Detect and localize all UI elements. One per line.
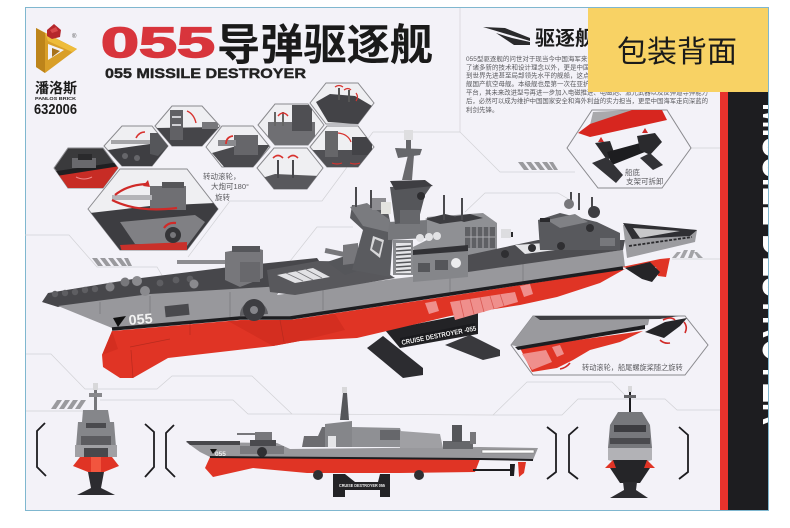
hex detail: propeller: 转动滚轮，船尾螺旋桨随之旋转 — [582, 363, 683, 372]
logo: Panlos Brick: PANLOS BRICK — [35, 96, 77, 101]
caption: rotating cannon: 大炮可180° — [211, 181, 249, 191]
main ship: hull number: 055 — [128, 310, 153, 328]
title: 055 MISSILE DESTROYER — [105, 65, 306, 81]
main ship: superstructure — [350, 130, 433, 277]
title: 055 — [101, 19, 215, 67]
main ship: wheel — [240, 299, 268, 321]
hex detail: rotating cannon — [88, 169, 220, 252]
stern view model — [605, 386, 655, 498]
decorative circuit lines — [25, 8, 720, 415]
title — [101, 11, 433, 81]
title: 导弹驱逐舰 — [217, 11, 433, 73]
main ship: bow studs — [52, 276, 198, 297]
hazard stripes — [51, 162, 558, 409]
hex detail: funnel and gun — [155, 106, 220, 148]
logo: Panlos Brick: ® — [72, 33, 77, 40]
main ship: display stand — [367, 312, 500, 378]
main ship model — [42, 130, 697, 378]
main ship: rear superstructure — [501, 192, 620, 258]
hex detail: stand: 支架可拆卸 — [626, 176, 664, 186]
main ship: mid block — [413, 195, 497, 282]
main ship: rear deck — [468, 240, 625, 272]
label: package back: 包装背面 — [617, 27, 737, 71]
caption: rotating cannon: 转动滚轮， — [203, 171, 240, 181]
hex detail: propeller — [511, 315, 708, 375]
main ship: hull sides — [58, 250, 625, 328]
section heading and paragraph: 平台，其未来改进型号再进一步加入电磁推进、电磁炮、激光武器以及反弹道导弹能力 — [466, 88, 708, 96]
side view model — [186, 387, 538, 497]
section heading and paragraph: 舰国产航空母舰。本级舰也是第一次在亚护航任 — [466, 79, 603, 88]
section icon: wings — [483, 27, 530, 45]
hex detail: masts — [257, 148, 323, 190]
section heading and paragraph: 驱逐舰 — [535, 22, 595, 51]
hex detail: bridge — [258, 104, 324, 147]
section heading and paragraph: 到世界先进甚至局部领先水平的舰船，这点让我 — [466, 70, 603, 80]
main ship: bow deck — [42, 258, 330, 307]
main ship: display stand: CRUISE DESTROYER -055 — [401, 326, 477, 347]
main ship: hull number — [113, 310, 153, 328]
section heading and paragraph: 了诸多新的技术和设计理念以外，更是中国海军 — [466, 62, 603, 72]
hex detail: stand — [567, 110, 691, 188]
main ship: forward turret — [325, 243, 360, 275]
main ship: waterline — [112, 268, 623, 329]
logo: Panlos Brick: 632006 — [34, 102, 77, 118]
hex detail: forward turret — [206, 126, 270, 168]
main ship: main gun — [177, 246, 263, 287]
hex detail: main gun — [104, 126, 170, 168]
main ship: pink vent blocks — [425, 284, 533, 320]
caption: rotating cannon: 旋转 — [215, 192, 230, 202]
hex detail: stand: 船底 — [625, 167, 640, 177]
label: package back — [588, 8, 768, 92]
section heading and paragraph — [466, 22, 708, 114]
main ship: deck stripes — [277, 268, 330, 283]
hex detail: bow section — [54, 148, 118, 188]
main ship: red lower hull — [102, 269, 625, 378]
stern hazard stripes — [672, 250, 703, 258]
main ship: propeller and rudder — [622, 258, 670, 282]
main ship: stern flight deck — [623, 223, 697, 258]
side view model: CRUISE DESTROYER 055 — [339, 483, 385, 488]
section heading and paragraph: 055型驱逐舰的问世对于现当今中国海军来说， — [466, 54, 600, 63]
side view model: 055 — [215, 451, 226, 458]
caption: rotating cannon — [203, 171, 249, 202]
hex detail: rear CIWS — [310, 83, 374, 124]
hex detail: funnel rotation — [310, 126, 374, 168]
front view model — [73, 383, 119, 495]
right black band — [720, 92, 768, 510]
section heading and paragraph: 后，必然可以成为维护中国国家安全和海外利益的实力担当，更是中国海军走向深蓝的 — [466, 96, 708, 105]
main ship: mid deck — [267, 261, 395, 295]
logo: Panlos Brick — [34, 24, 77, 118]
bracket marks — [37, 423, 688, 479]
section heading and paragraph: 利剑先锋。 — [466, 105, 498, 114]
logo: Panlos Brick: 潘洛斯 — [35, 80, 77, 96]
main ship: winch detail — [165, 304, 190, 317]
